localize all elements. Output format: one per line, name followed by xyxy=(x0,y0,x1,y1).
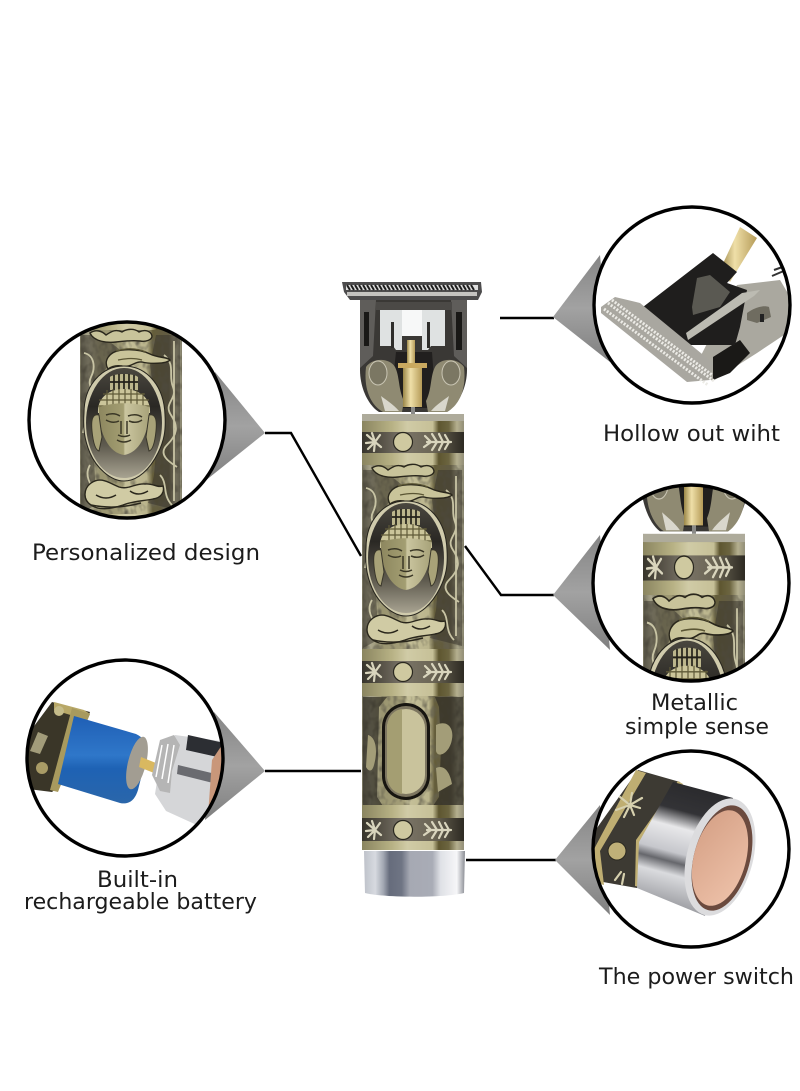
connector: hollow out xyxy=(500,317,554,319)
detail circle xyxy=(27,320,227,520)
label: The power switch: The power switch xyxy=(598,965,794,990)
detail circle xyxy=(594,207,792,403)
pointer triangle xyxy=(553,255,610,362)
callout: built-in battery xyxy=(20,660,265,856)
label: Metallic simple sense: Metallic xyxy=(651,691,738,716)
detail circle xyxy=(591,483,791,683)
label: Metallic simple sense xyxy=(625,691,769,740)
label: Built-in rechargeable battery: rechargeable battery xyxy=(24,890,257,915)
label: Built-in rechargeable battery xyxy=(24,868,257,915)
connector: personalized design xyxy=(265,433,361,556)
main product: trimmer xyxy=(342,282,482,897)
connector: metallic sense xyxy=(465,546,554,595)
detail circle xyxy=(20,660,228,856)
pointer triangle xyxy=(205,712,265,820)
label: Personalized design: Personalized design xyxy=(32,541,260,566)
pointer triangle xyxy=(555,805,610,915)
callout: metallic simple sense xyxy=(553,483,791,683)
callout: power switch xyxy=(555,751,789,947)
connector lines xyxy=(265,318,556,860)
pointer triangle xyxy=(205,372,265,481)
label: Built-in rechargeable battery: Built-in xyxy=(97,868,178,893)
connector: power switch xyxy=(466,859,556,861)
pointer triangle xyxy=(553,535,610,650)
callout: hollow out xyxy=(553,207,792,403)
label: Hollow out wiht: Hollow out wiht xyxy=(603,422,780,447)
label: Metallic simple sense: simple sense xyxy=(625,715,769,740)
connector: built-in battery xyxy=(265,770,361,772)
callout: personalized design xyxy=(27,320,265,520)
detail circle xyxy=(592,751,789,947)
